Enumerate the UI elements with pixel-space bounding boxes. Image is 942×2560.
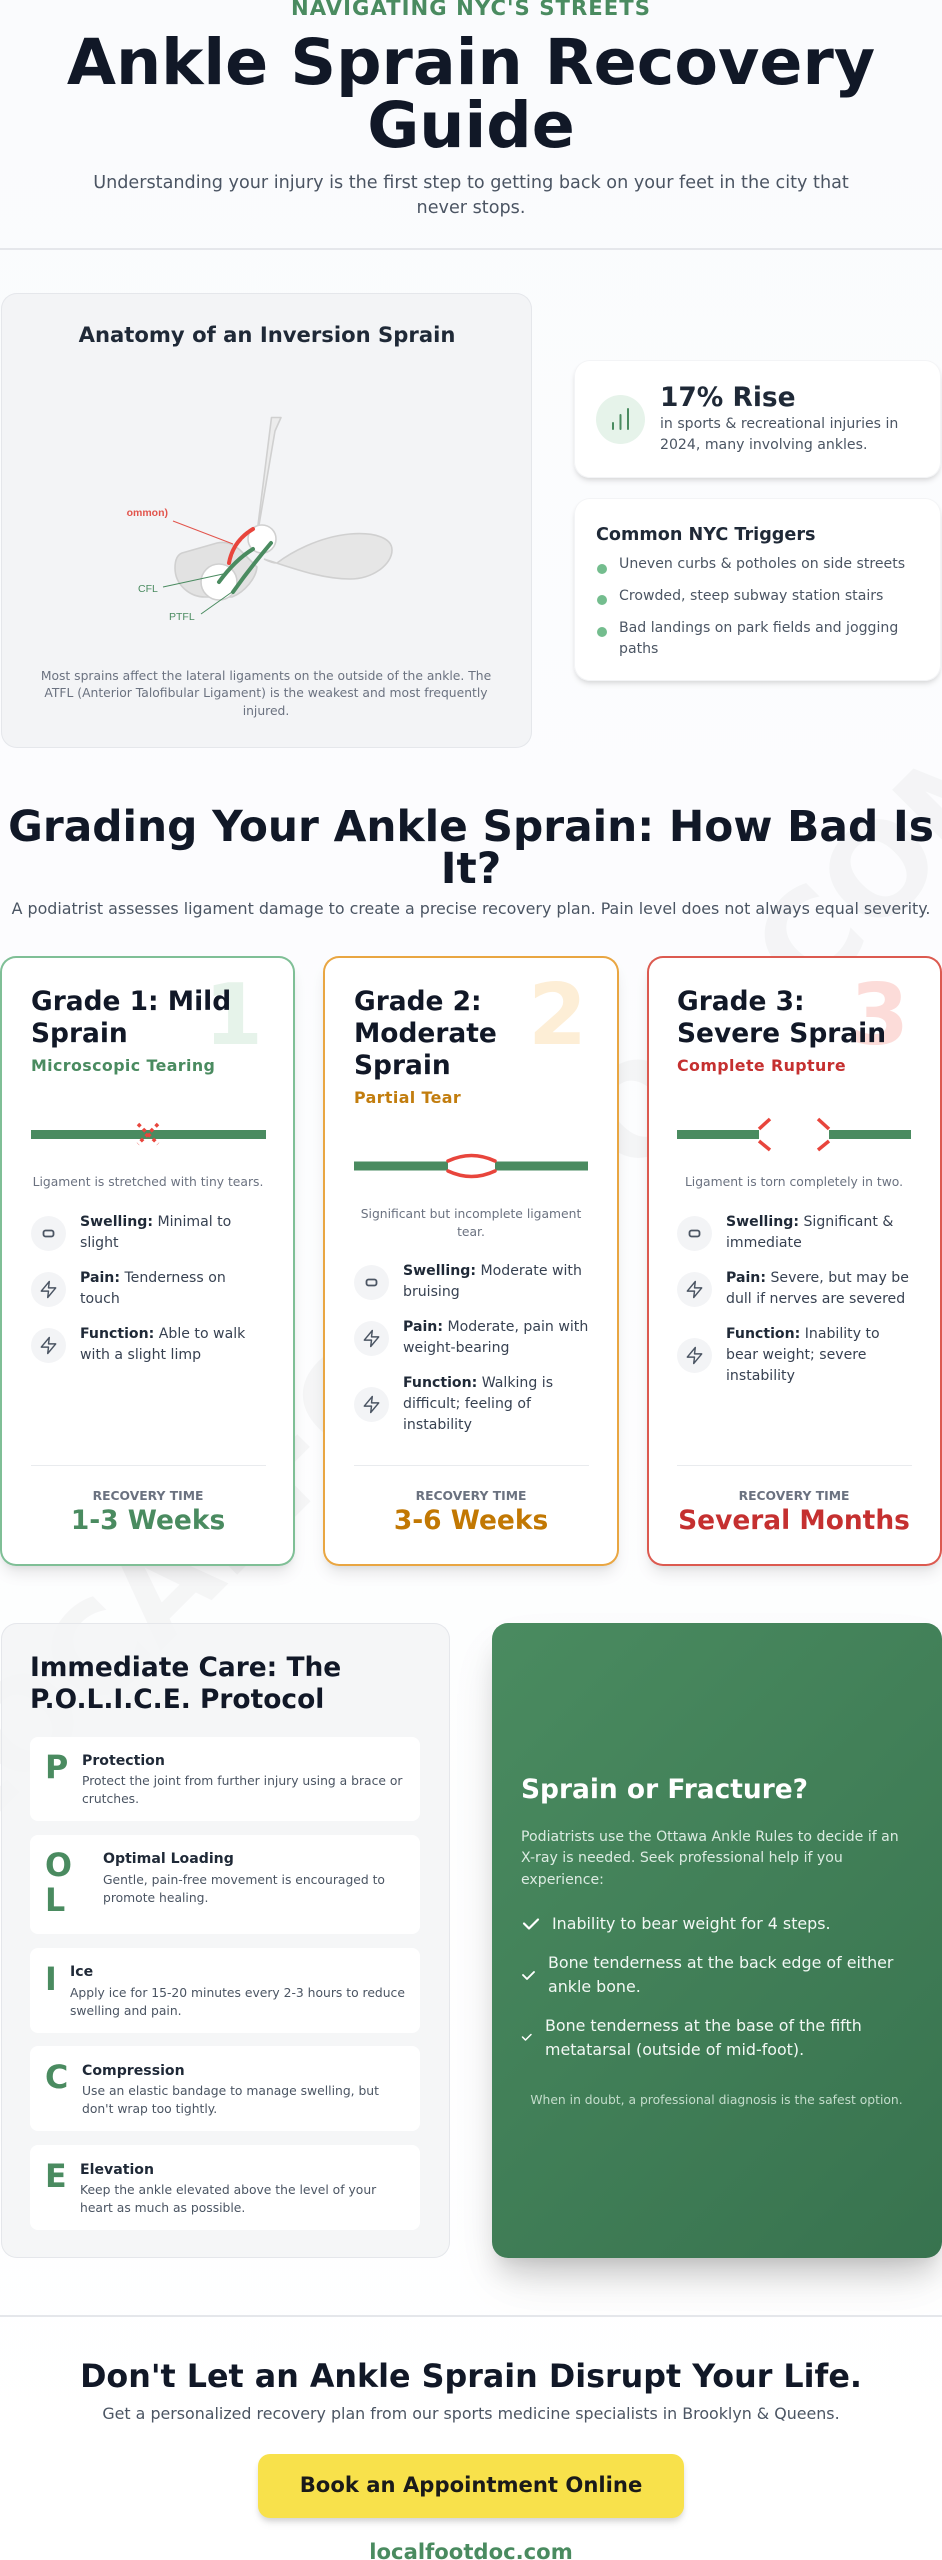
checklist item 3 <box>522 2016 862 2059</box>
section heading: grading: It? <box>441 844 501 893</box>
diagram caption: Ligament is stretched with tiny tears. <box>33 1175 263 1189</box>
symptom: swelling <box>354 1263 582 1300</box>
diagram caption: Ligament is torn completely in two. <box>685 1175 903 1189</box>
checklist item 2: ankle bone. <box>548 1977 641 1996</box>
panel: grade 3 card <box>647 956 942 1566</box>
step: optimal loading <box>30 1835 420 1934</box>
symptom: function: Function: Able to walk <box>80 1326 245 1342</box>
step: optimal loading: Gentle, pain-free movement is encouraged to <box>103 1873 385 1887</box>
diagram caption: Significant but incomplete ligament <box>361 1207 581 1221</box>
symptom: function: difficult; feeling of <box>403 1396 531 1412</box>
panel intro: Podiatrists use the Ottawa Ankle Rules to decide if an <box>521 1829 899 1845</box>
checklist item 3: metatarsal (outside of mid-foot). <box>545 2040 804 2059</box>
checklist item 2: Bone tenderness at the back edge of either <box>548 1953 893 1972</box>
ligament diagram: rupture <box>677 1118 911 1152</box>
symptom: swelling: immediate <box>726 1235 802 1251</box>
panel intro: experience: <box>521 1872 604 1888</box>
button: book appointment <box>258 2454 684 2518</box>
button: book appointment: Book an Appointment Online <box>300 2472 642 2497</box>
symptom: function: with a slight limp <box>80 1347 201 1363</box>
panel intro: X-ray is needed. Seek professional help if you <box>521 1850 843 1866</box>
symptom: pain: dull if nerves are severed <box>726 1291 905 1307</box>
ligament diagram: partial tear <box>354 1154 588 1178</box>
symptom: swelling: bruising <box>403 1284 460 1300</box>
panel: grade 2 card <box>324 956 618 1566</box>
symptom: swelling: Swelling: Minimal to <box>80 1214 231 1230</box>
step: ice: Apply ice for 15-20 minutes every 2-3 hours to reduce <box>70 1986 405 2000</box>
step: optimal loading: Optimal Loading <box>103 1851 234 1867</box>
card subtitle: Partial Tear <box>354 1088 461 1107</box>
symptom: function <box>31 1326 246 1363</box>
intro text: Understanding your injury is the first step to getting back on your feet in the city that <box>93 173 849 193</box>
panel: common NYC triggers <box>574 498 941 681</box>
symptom: pain <box>354 1319 588 1356</box>
anatomy caption <box>41 669 491 718</box>
panel heading <box>30 1652 341 1715</box>
recovery time: 3-6 Weeks <box>394 1505 548 1536</box>
title: Ankle Sprain Recovery <box>67 25 875 99</box>
trigger list: paths <box>619 641 658 657</box>
section heading: grading <box>8 802 934 893</box>
symptom: function <box>677 1326 880 1384</box>
trigger list: Uneven curbs & potholes on side streets <box>619 556 905 572</box>
symptom: pain: Pain: Severe, but may be <box>726 1270 909 1286</box>
symptom: function: Function: Walking is <box>403 1375 553 1391</box>
step: optimal loading: promote healing. <box>103 1891 208 1905</box>
big number 1: 1 <box>204 965 263 1064</box>
symptom: swelling <box>31 1214 231 1251</box>
card title: Moderate <box>354 1018 497 1049</box>
recovery time: 1-3 Weeks <box>71 1505 225 1536</box>
section subheading: A podiatrist assesses ligament damage to create a precise recovery plan. Pain level does not always equal severity. <box>12 899 930 918</box>
card subtitle: Microscopic Tearing <box>31 1056 215 1075</box>
anatomy caption: injured. <box>243 704 289 718</box>
card title: Grade 2: <box>354 986 482 1017</box>
card title: Sprain <box>354 1050 451 1081</box>
recovery time: Several Months <box>678 1505 910 1536</box>
recovery time <box>71 1489 225 1536</box>
symptom: pain: touch <box>80 1291 120 1307</box>
footer call to action <box>0 2315 942 2560</box>
step: ice: I <box>45 1962 57 1998</box>
symptom: function: instability <box>403 1417 472 1433</box>
panel heading: P.O.L.I.C.E. Protocol <box>30 1684 324 1715</box>
panel intro <box>521 1829 899 1888</box>
symptom: function: instability <box>726 1368 795 1384</box>
symptom: pain: weight-bearing <box>403 1340 509 1356</box>
step: optimal loading: L <box>45 1883 65 1919</box>
panel: sprain or fracture <box>492 1623 942 2258</box>
diagram caption <box>361 1207 582 1239</box>
panel heading: Sprain or Fracture? <box>521 1774 808 1805</box>
intro text <box>93 173 849 218</box>
intro text: never stops. <box>417 198 525 218</box>
anatomy caption: Most sprains affect the lateral ligaments on the outside of the ankle. The <box>41 669 491 683</box>
card title: Sprain <box>31 1018 128 1049</box>
header <box>0 0 942 250</box>
panel: anatomy of an inversion sprain <box>1 293 532 748</box>
panel note: When in doubt, a professional diagnosis is the safest option. <box>530 2093 903 2107</box>
section heading: grading: Grading Your Ankle Sprain: How Bad Is <box>8 802 934 851</box>
symptom: swelling: Swelling: Moderate with <box>403 1263 582 1279</box>
step: protection: P <box>45 1750 68 1786</box>
diagram caption: tear. <box>457 1225 485 1239</box>
symptom: swelling: slight <box>80 1235 119 1251</box>
heading: anatomy: Anatomy of an Inversion Sprain <box>79 322 455 347</box>
anatomy caption: ATFL (Anterior Talofibular Ligament) is the weakest and most frequently <box>44 686 488 700</box>
step: ice <box>30 1948 420 2033</box>
ligament diagram: stretched <box>31 1122 266 1146</box>
step: elevation: Elevation <box>80 2162 154 2178</box>
heading: triggers: Common NYC Triggers <box>596 525 816 545</box>
recovery time: RECOVERY TIME <box>93 1489 203 1503</box>
card title: Grade 3: <box>677 986 805 1017</box>
step: ice: Ice <box>70 1964 93 1980</box>
step: elevation: E <box>45 2159 67 2195</box>
recovery time: RECOVERY TIME <box>739 1489 849 1503</box>
symptom: swelling <box>677 1214 893 1251</box>
stat description: in sports & recreational injuries in <box>660 416 898 432</box>
trigger list <box>597 556 905 657</box>
symptom: pain: Pain: Tenderness on <box>80 1270 226 1286</box>
step: elevation: heart as much as possible. <box>80 2201 245 2215</box>
step: protection <box>30 1737 420 1821</box>
step: compression: C <box>45 2060 68 2096</box>
step: protection: crutches. <box>82 1792 139 1806</box>
card title <box>31 986 231 1049</box>
symptom: swelling: Swelling: Significant & <box>726 1214 893 1230</box>
title <box>67 25 875 162</box>
card title <box>677 986 886 1049</box>
chart: ankle diagram: PTFL <box>169 611 195 623</box>
title: Guide <box>367 88 575 162</box>
card subtitle: Complete Rupture <box>677 1056 846 1075</box>
stat value: 17% Rise <box>660 382 796 413</box>
stat description: 2024, many involving ankles. <box>660 437 867 453</box>
chart: ankle diagram: CFL <box>138 583 158 595</box>
trigger list: Bad landings on park fields and jogging <box>619 620 898 636</box>
panel: grade 1 card <box>1 956 295 1566</box>
symptom: pain <box>677 1270 909 1307</box>
recovery time <box>394 1489 548 1536</box>
trigger list: Crowded, steep subway station stairs <box>619 588 883 604</box>
panel: 17% rise stat <box>574 360 941 478</box>
symptom: pain: Pain: Moderate, pain with <box>403 1319 588 1335</box>
checklist item 2 <box>522 1953 894 1996</box>
panel: P.O.L.I.C.E. protocol <box>1 1623 450 2258</box>
step: compression: Compression <box>82 2063 185 2079</box>
step: compression: Use an elastic bandage to manage swelling, but <box>82 2084 379 2098</box>
symptom: function <box>354 1375 553 1433</box>
chart: ankle diagram <box>126 416 393 623</box>
symptom: pain <box>31 1270 226 1307</box>
footer heading: Don't Let an Ankle Sprain Disrupt Your Life. <box>80 2359 862 2395</box>
icon: bar chart <box>596 395 645 444</box>
step: ice: swelling and pain. <box>70 2004 182 2018</box>
step: elevation <box>30 2145 420 2230</box>
card title: Severe Sprain <box>677 1018 886 1049</box>
big number 3: 3 <box>850 965 909 1064</box>
card title <box>354 986 497 1081</box>
step: optimal loading: O <box>45 1848 72 1884</box>
step: protection: Protect the joint from further injury using a brace or <box>82 1774 402 1788</box>
card title: Grade 1: Mild <box>31 986 231 1017</box>
checklist item 3: Bone tenderness at the base of the fifth <box>545 2016 862 2035</box>
big number 2: 2 <box>528 965 587 1064</box>
symptom: function: Function: Inability to <box>726 1326 880 1342</box>
footer subheading: Get a personalized recovery plan from our sports medicine specialists in Brooklyn & Queens. <box>102 2404 840 2423</box>
step: elevation: Keep the ankle elevated above the level of your <box>80 2183 376 2197</box>
symptom: function: bear weight; severe <box>726 1347 866 1363</box>
step: compression: don't wrap too tightly. <box>82 2102 217 2116</box>
recovery time: RECOVERY TIME <box>416 1489 526 1503</box>
checklist item 1: Inability to bear weight for 4 steps. <box>552 1914 831 1933</box>
step: compression <box>30 2046 420 2131</box>
panel heading: Immediate Care: The <box>30 1652 341 1683</box>
stat description <box>660 416 898 453</box>
step: protection: Protection <box>82 1753 165 1769</box>
recovery time <box>678 1489 910 1536</box>
